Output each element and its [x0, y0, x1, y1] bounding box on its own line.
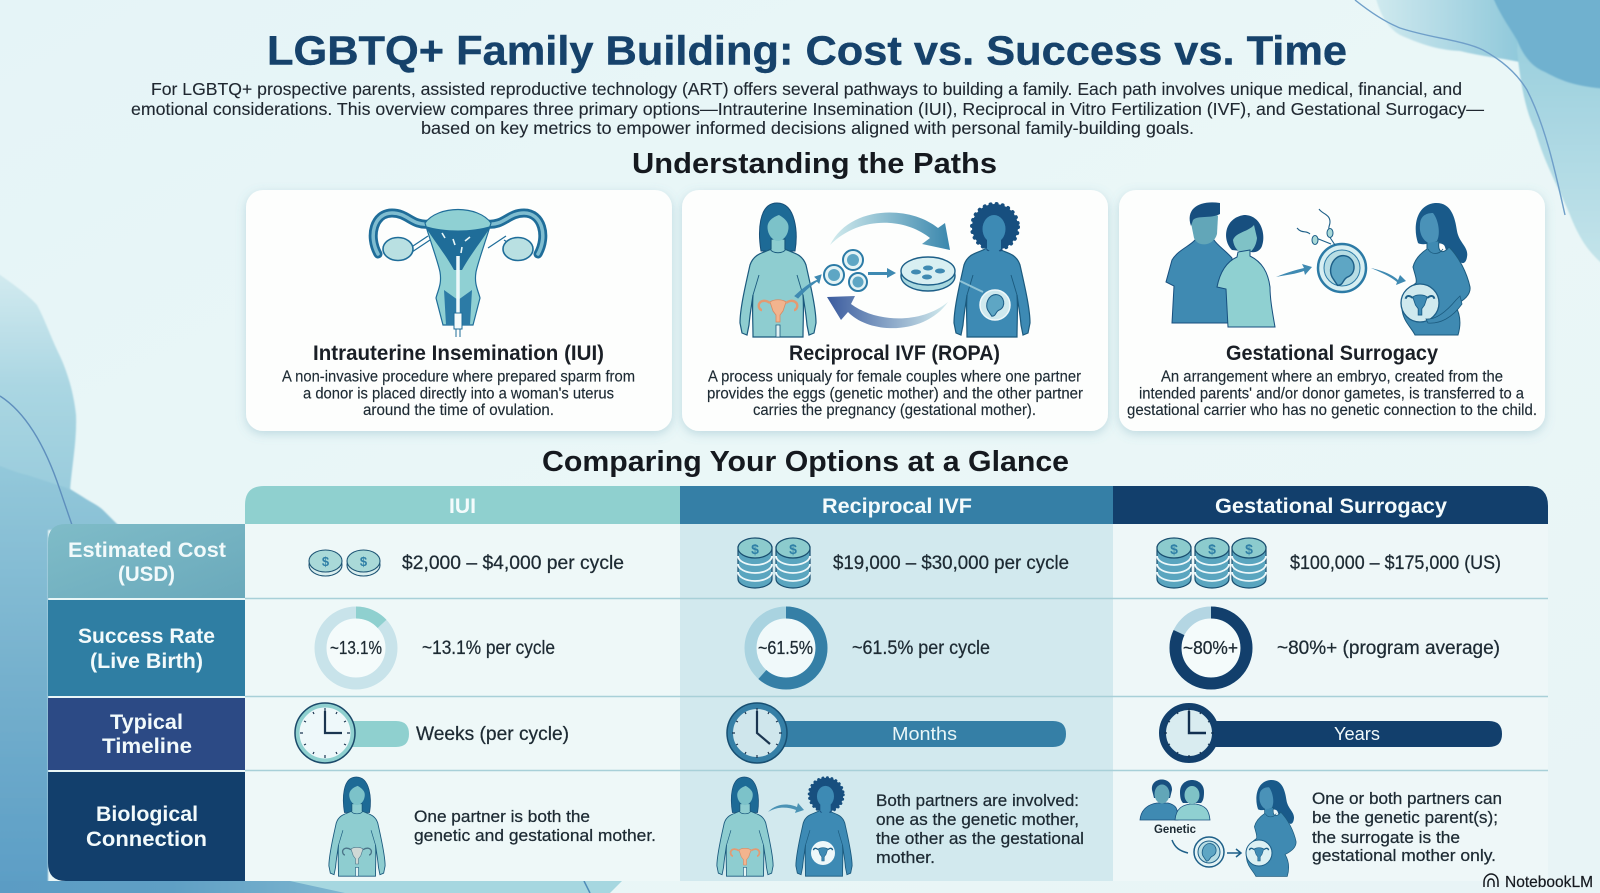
- card heading: Gestational Surrogacy: [1226, 341, 1438, 365]
- card text: [282, 368, 635, 419]
- card text: gestational carrier who has no genetic connection to the child.: [1127, 402, 1537, 419]
- row label: success rate: Success Rate: [78, 624, 215, 648]
- donut: IUI success: ~13.1%: [330, 638, 382, 658]
- cost: IUI: $2,000 – $4,000 per cycle: [402, 553, 624, 574]
- card heading: Reciprocal IVF (ROPA): [789, 341, 1000, 365]
- biology: IVF: [717, 777, 1084, 876]
- table body background: [245, 524, 1548, 881]
- panel: reciprocal IVF card: [682, 190, 1108, 431]
- column header: Gestational Surrogacy: Gestational Surrogacy: [1215, 495, 1447, 518]
- donut: IUI success: ~13.1% per cycle: [422, 638, 555, 659]
- card text: provides the eggs (genetic mother) and the other partner: [707, 386, 1084, 402]
- heading: understanding the paths: Understanding the Paths: [632, 148, 997, 180]
- card text: a donor is placed directly into a woman's uterus: [303, 386, 614, 402]
- biology: IVF: one as the genetic mother,: [876, 810, 1079, 829]
- intro text: emotional considerations. This overview compares three primary options—Intrauterine Insemination (IUI), Reciprocal in Vitro Fertilization (IVF), and Gestational Surrogacy—: [131, 99, 1485, 119]
- comparison table: [48, 486, 1548, 881]
- timeline: weeks: Weeks (per cycle): [416, 724, 569, 745]
- card text: intended parents' and/or donor gametes, is transferred to a: [1139, 386, 1524, 402]
- panel: gestational surrogacy card: [1119, 190, 1545, 431]
- biology: IUI: One partner is both the: [414, 807, 590, 826]
- donut: surrogacy success: ~80%+ (program average): [1277, 638, 1500, 659]
- logo: NotebookLM: NotebookLM: [1505, 874, 1593, 891]
- timeline: years: Years: [1334, 723, 1380, 744]
- donut: IUI success: [320, 612, 555, 684]
- intro text: [131, 79, 1485, 138]
- biology: IVF: mother.: [876, 848, 935, 867]
- column header: IUI: IUI: [449, 495, 476, 518]
- icon: uterus with catheter: [373, 210, 543, 337]
- donut: IVF success: ~61.5% per cycle: [852, 638, 990, 659]
- row label: estimated cost: (USD): [118, 562, 175, 586]
- card text: A non-invasive procedure where prepared sparm from: [282, 368, 635, 386]
- card text: carries the pregnancy (gestational mother).: [753, 402, 1036, 419]
- icon: cycle arrows, eggs and dish: [795, 212, 955, 328]
- biology: IVF: Both partners are involved:: [876, 791, 1079, 810]
- timeline: years: [1162, 706, 1502, 760]
- donut: IVF success: ~61.5%: [758, 638, 813, 658]
- cost: surrogacy: $100,000 – $175,000 (US): [1290, 553, 1501, 574]
- cost: surrogacy: [1157, 538, 1501, 588]
- title: LGBTQ+ Family Building: Cost vs. Success vs. Time: [267, 28, 1347, 74]
- cost: IVF: $19,000 – $30,000 per cycle: [833, 553, 1069, 574]
- biology: surrogacy: Genetic: [1154, 822, 1196, 836]
- biology: IUI: genetic and gestational mother.: [414, 826, 656, 845]
- intro text: based on key metrics to empower informed decisions aligned with personal family-building goals.: [421, 118, 1194, 138]
- card text: [1127, 368, 1537, 419]
- icon: pregnant carrier: [1401, 203, 1470, 335]
- intro text: For LGBTQ+ prospective parents, assisted reproductive technology (ART) offers several pathways to building a family. Each path involves unique medical, financial, and: [151, 79, 1462, 99]
- timeline: months: [727, 703, 1066, 763]
- row label: estimated cost: Estimated Cost: [68, 538, 226, 562]
- donut: IVF success: [750, 612, 990, 684]
- timeline: months: Months: [892, 723, 957, 744]
- row label: typical timeline: Typical: [110, 710, 183, 734]
- donut: surrogacy success: [1176, 612, 1500, 684]
- cost: IVF: [738, 538, 1069, 588]
- card text: [707, 368, 1084, 419]
- column header: Gestational Surrogacy: [1113, 486, 1548, 524]
- card text: A process uniqualy for female couples where one partner: [708, 368, 1082, 386]
- row label: success rate: [48, 600, 245, 696]
- card text: around the time of ovulation.: [363, 402, 554, 419]
- row label: estimated cost: [48, 524, 245, 598]
- column header: IUI: [245, 486, 680, 524]
- row label: success rate: (Live Birth): [90, 649, 203, 673]
- row label: typical timeline: [48, 698, 245, 770]
- biology: surrogacy: gestational mother only.: [1312, 846, 1496, 865]
- row label: biological connection: Connection: [86, 827, 207, 851]
- row label: biological connection: Biological: [96, 802, 198, 826]
- card heading: Intrauterine Insemination (IUI): [313, 341, 604, 365]
- heading: comparing options: Comparing Your Options at a Glance: [542, 446, 1069, 478]
- icon: intended parents: [1166, 202, 1275, 327]
- biology: surrogacy: One or both partners can: [1312, 789, 1502, 808]
- icon: partner one with uterus: [740, 203, 816, 337]
- biology: surrogacy: [1140, 779, 1502, 876]
- column header: Reciprocal IVF: [680, 486, 1113, 524]
- panel: IUI card: [246, 190, 672, 431]
- biology: IVF: the other as the gestational: [876, 829, 1084, 848]
- row label: typical timeline: Timeline: [102, 734, 192, 758]
- cost: IUI: [309, 550, 624, 576]
- biology: surrogacy: be the genetic parent(s);: [1312, 808, 1498, 827]
- column header: Reciprocal IVF: Reciprocal IVF: [822, 495, 972, 518]
- timeline: weeks: [295, 703, 569, 763]
- card text: An arrangement where an embryo, created from the: [1161, 368, 1503, 386]
- icon: partner two carrying: [954, 204, 1030, 337]
- donut: surrogacy success: ~80%+: [1183, 638, 1238, 658]
- row label: biological connection: [48, 772, 245, 881]
- icon: embryo with sperm: [1276, 209, 1406, 292]
- biology: surrogacy: the surrogate is the: [1312, 828, 1460, 847]
- biology: IUI: [329, 777, 656, 876]
